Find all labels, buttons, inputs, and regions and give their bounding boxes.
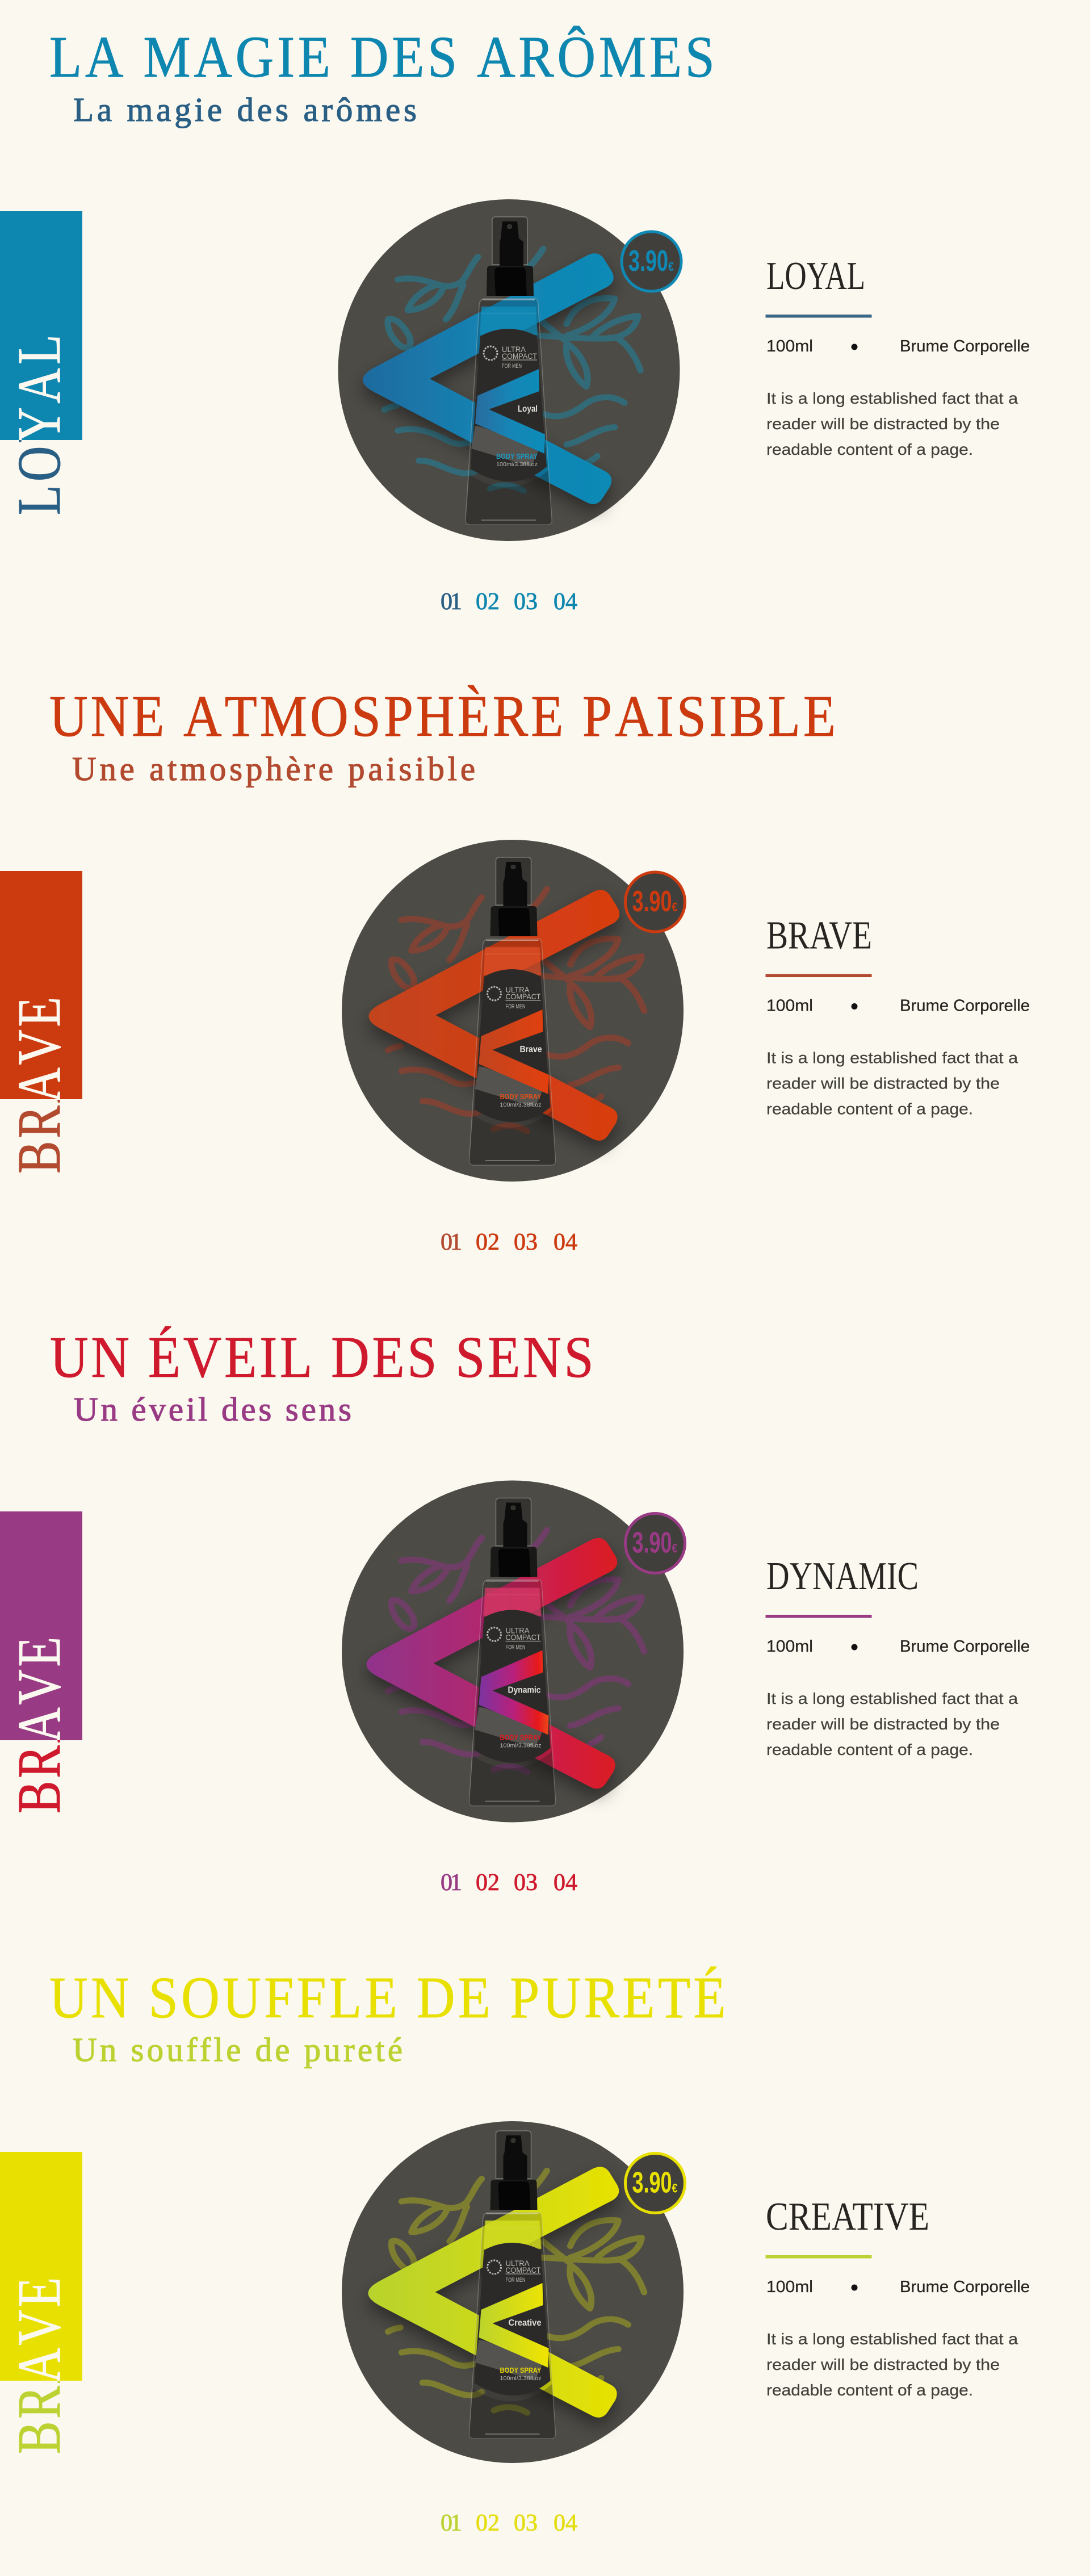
bottle: ULTRA — [502, 345, 526, 354]
bottle: FOR MEN — [505, 2277, 526, 2284]
description: reader will be distracted by the — [766, 1715, 1000, 1733]
bottle: 100ml/3.38fl.oz — [500, 1743, 542, 1749]
product details — [765, 2195, 1030, 2399]
size and type: Brume Corporelle — [900, 1637, 1030, 1656]
vertical name — [19, 1639, 61, 1812]
bottle: BODY SPRAY — [500, 1733, 542, 1742]
chevron — [369, 890, 619, 1141]
pagination — [441, 589, 577, 615]
vertical name — [19, 2279, 61, 2453]
bottle — [469, 2131, 555, 2439]
size and type: Brume Corporelle — [900, 2278, 1030, 2296]
vertical name: LOYAL — [6, 334, 73, 515]
bottle: Creative — [509, 2318, 542, 2328]
pagination: 04 — [554, 2510, 577, 2536]
size and type — [766, 337, 1030, 355]
description — [766, 1690, 1018, 1758]
title: UNE ATMOSPHÈRE PAISIBLE — [49, 684, 836, 749]
section 4: Un souffle de pureté — [0, 1966, 1030, 2536]
price badge: € — [672, 900, 678, 914]
subtitle: Un éveil des sens — [74, 1390, 351, 1428]
product details — [765, 914, 1030, 1117]
vertical name: BRAVE — [6, 2277, 73, 2454]
bottle: FOR MEN — [502, 363, 522, 370]
pagination — [441, 1870, 577, 1896]
rule — [765, 315, 872, 318]
chevron — [367, 1538, 617, 1788]
size and type: 100ml — [766, 997, 813, 1015]
bottle: ULTRA — [505, 2259, 530, 2268]
vertical name: BRAVE — [6, 997, 73, 1174]
leaf pattern — [388, 1530, 644, 1772]
leaf pattern — [388, 889, 644, 1131]
dark circle — [342, 1481, 684, 1823]
pagination: 01 — [441, 2510, 462, 2536]
bottle: BODY SPRAY — [500, 2366, 542, 2374]
name: LOYAL — [766, 254, 865, 298]
dark circle — [342, 840, 684, 1182]
size and type: 100ml — [766, 2278, 813, 2296]
leaf pattern — [388, 2171, 644, 2412]
price badge — [626, 1514, 685, 1573]
pagination — [441, 1229, 577, 1255]
size and type — [766, 2278, 1030, 2296]
bottle: BODY SPRAY — [496, 452, 538, 460]
bottle: 100ml/3.38fl.oz — [500, 2376, 542, 2382]
vertical name — [18, 337, 60, 514]
pagination: 01 — [441, 1229, 462, 1255]
description — [766, 1049, 1018, 1117]
description — [766, 389, 1018, 458]
description: reader will be distracted by the — [766, 2356, 1000, 2373]
description: It is a long established fact that a — [766, 2330, 1018, 2348]
description: readable content of a page. — [766, 1741, 973, 1758]
product details — [765, 1555, 1030, 1758]
description: readable content of a page. — [766, 2381, 973, 2399]
bottle — [469, 1498, 555, 1806]
rule — [765, 974, 872, 977]
pagination: 01 — [441, 1870, 462, 1896]
product illustration — [342, 840, 685, 1182]
bottle: FOR MEN — [505, 1644, 526, 1651]
product illustration — [342, 1481, 685, 1823]
vertical name: BRAVE — [6, 997, 73, 1174]
bottle: ULTRA — [505, 985, 530, 994]
rule — [765, 2255, 872, 2259]
rule — [765, 1615, 872, 1618]
name: DYNAMIC — [766, 1555, 919, 1598]
description: reader will be distracted by the — [766, 415, 1000, 433]
pagination: 01 — [441, 589, 462, 615]
title: LA MAGIE DES ARÔMES — [49, 25, 715, 90]
pagination: 04 — [554, 1229, 577, 1255]
pagination: 03 — [514, 1229, 538, 1255]
subtitle: Une atmosphère paisible — [72, 750, 475, 788]
bottle — [466, 217, 552, 525]
section 1: La magie des arômes — [0, 25, 1030, 615]
price badge: € — [672, 2181, 678, 2195]
vertical name: BRAVE — [6, 1637, 73, 1813]
pagination: 02 — [476, 589, 500, 615]
bottle: Dynamic — [508, 1685, 541, 1695]
pagination: 02 — [476, 1229, 500, 1255]
section 2: Une atmosphère paisible — [0, 684, 1030, 1255]
price badge: 3.90 — [632, 1526, 672, 1559]
size and type: Brume Corporelle — [900, 997, 1030, 1015]
price badge — [622, 232, 681, 291]
colour block — [0, 871, 82, 1099]
pagination: 02 — [476, 2510, 500, 2536]
bottle — [469, 857, 555, 1165]
name: BRAVE — [766, 914, 872, 957]
bottle: 100ml/3.38fl.oz — [500, 1102, 542, 1108]
size and type: 100ml — [766, 337, 813, 355]
pagination: 04 — [554, 1870, 577, 1896]
price badge: 3.90 — [632, 2167, 672, 2200]
vertical name: LOYAL — [6, 334, 73, 515]
colour block — [0, 2152, 82, 2381]
product details — [765, 254, 1030, 458]
section 3: Un éveil des sens — [0, 1325, 1030, 1896]
size and type: Brume Corporelle — [900, 337, 1030, 355]
vertical name: BRAVE — [6, 2277, 73, 2454]
size and type — [766, 1637, 1030, 1656]
description: reader will be distracted by the — [766, 1074, 1000, 1092]
bottle: COMPACT — [505, 992, 541, 1001]
dark circle — [338, 199, 680, 541]
chevron — [363, 253, 614, 504]
price badge: € — [668, 259, 674, 274]
pagination: 03 — [514, 2510, 538, 2536]
bottle: COMPACT — [505, 2265, 541, 2275]
title: UN SOUFFLE DE PURETÉ — [49, 1966, 726, 2030]
price badge — [626, 872, 685, 932]
subtitle: La magie des arômes — [73, 91, 417, 128]
name: CREATIVE — [766, 2195, 929, 2239]
size and type: 100ml — [766, 1637, 813, 1656]
leaf pattern — [384, 249, 640, 491]
product illustration — [338, 199, 681, 541]
description: readable content of a page. — [766, 1100, 973, 1117]
bottle: COMPACT — [505, 1633, 541, 1642]
subtitle: Un souffle de pureté — [73, 2031, 403, 2068]
description: It is a long established fact that a — [766, 389, 1018, 407]
product illustration — [342, 2121, 685, 2463]
bottle: COMPACT — [502, 351, 537, 361]
bottle: FOR MEN — [505, 1003, 526, 1010]
pagination: 03 — [514, 589, 538, 615]
price badge: 3.90 — [632, 885, 672, 918]
pagination: 02 — [476, 1870, 500, 1896]
description: It is a long established fact that a — [766, 1049, 1018, 1066]
pagination — [441, 2510, 577, 2536]
pagination: 04 — [554, 589, 577, 615]
chevron — [368, 2167, 619, 2418]
vertical name: BRAVE — [6, 1637, 73, 1813]
price badge — [626, 2153, 685, 2213]
size and type — [766, 997, 1030, 1015]
pagination: 03 — [514, 1870, 538, 1896]
colour block — [0, 1511, 82, 1740]
dark circle — [342, 2121, 684, 2463]
price badge: 3.90 — [628, 245, 668, 278]
title: UN ÉVEIL DES SENS — [50, 1325, 594, 1390]
bottle: Loyal — [518, 404, 538, 414]
vertical name — [19, 999, 61, 1172]
bottle: Brave — [520, 1045, 542, 1054]
description: It is a long established fact that a — [766, 1690, 1018, 1707]
bottle: BODY SPRAY — [500, 1092, 542, 1101]
bottle: 100ml/3.38fl.oz — [496, 462, 538, 468]
description — [766, 2330, 1018, 2399]
price badge: € — [672, 1541, 678, 1556]
bottle: ULTRA — [505, 1626, 530, 1635]
colour block — [0, 211, 82, 440]
description: readable content of a page. — [766, 441, 973, 458]
